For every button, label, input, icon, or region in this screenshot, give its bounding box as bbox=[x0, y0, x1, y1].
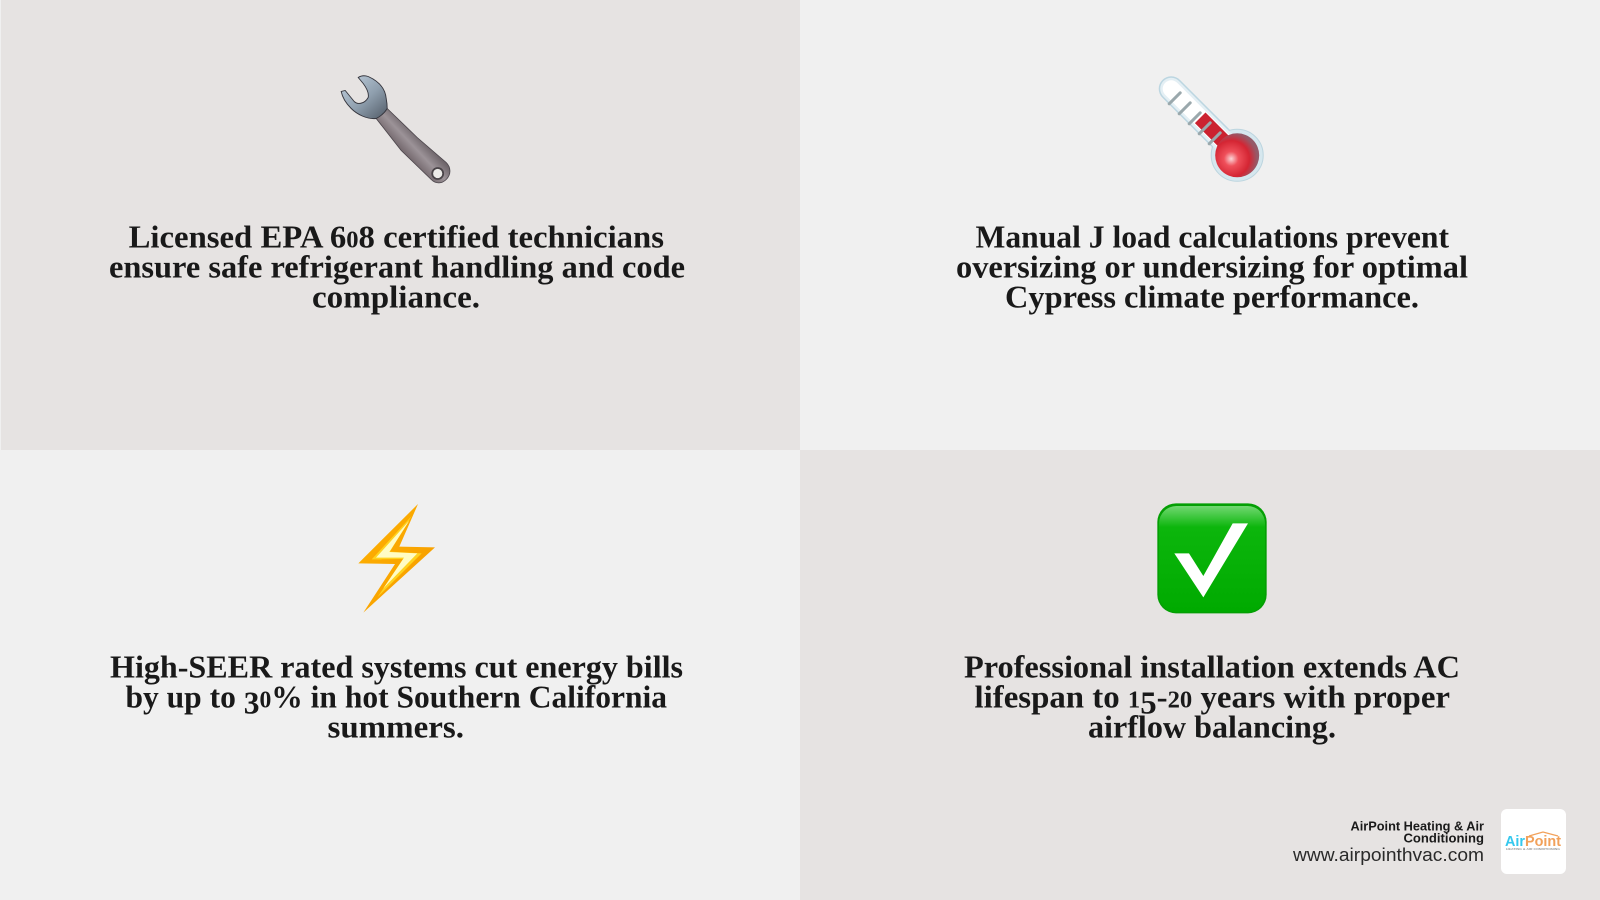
panel: licensed technicians bbox=[1, 0, 800, 450]
text: professional installation: - bbox=[1157, 678, 1168, 714]
logo card: AirPoint bbox=[1505, 833, 1561, 850]
text: load calculations bbox=[956, 218, 1468, 314]
text: high-SEER systems: 0 bbox=[259, 688, 271, 714]
text: high-SEER systems: by up to bbox=[126, 678, 238, 714]
text: licensed technicians: Licensed EPA 608 certified technicians bbox=[129, 218, 664, 254]
text: professional installation: airflow balancing. bbox=[1088, 708, 1336, 744]
company name bbox=[1350, 820, 1484, 846]
panel: load calculations bbox=[800, 0, 1600, 450]
logo card bbox=[1501, 809, 1566, 874]
text: professional installation: 5 bbox=[1140, 684, 1157, 720]
text: professional installation: lifespan to 1 bbox=[974, 678, 1140, 714]
text: load calculations: Manual J load calculations prevent bbox=[976, 218, 1449, 254]
logo card: HEATING & AIR CONDITIONING bbox=[1506, 847, 1561, 851]
text: licensed technicians: ensure safe refrigerant handling and code bbox=[109, 248, 685, 284]
text: load calculations: oversizing or undersizing for optimal bbox=[956, 248, 1468, 284]
text: licensed technicians: compliance. bbox=[312, 278, 480, 314]
company name: Conditioning bbox=[1404, 832, 1484, 846]
text: high-SEER systems bbox=[110, 648, 683, 744]
text: professional installation: Professional installation extends AC bbox=[964, 648, 1460, 684]
text: licensed technicians bbox=[109, 218, 685, 314]
icon: wrench bbox=[341, 76, 450, 183]
text: high-SEER systems: High-SEER rated systems cut energy bills bbox=[110, 648, 683, 684]
text: high-SEER systems: % in hot Southern California bbox=[271, 678, 673, 714]
company name: AirPoint Heating & Air bbox=[1350, 820, 1484, 834]
text: professional installation: 20 years with proper bbox=[1168, 678, 1443, 714]
brand footer bbox=[1292, 809, 1566, 874]
text: high-SEER systems: summers. bbox=[328, 708, 464, 744]
text: high-SEER systems: 3 bbox=[244, 684, 259, 720]
icon: green check mark bbox=[1157, 503, 1267, 613]
panel: professional installation bbox=[800, 450, 1600, 900]
icon: thermometer bbox=[1169, 89, 1263, 181]
text: load calculations: Cypress climate performance. bbox=[1005, 278, 1419, 314]
icon: lightning bolt bbox=[358, 504, 435, 613]
website: www.airpointhvac.com bbox=[1292, 845, 1484, 865]
panel: high-SEER systems bbox=[1, 450, 800, 900]
text: professional installation bbox=[964, 648, 1460, 744]
